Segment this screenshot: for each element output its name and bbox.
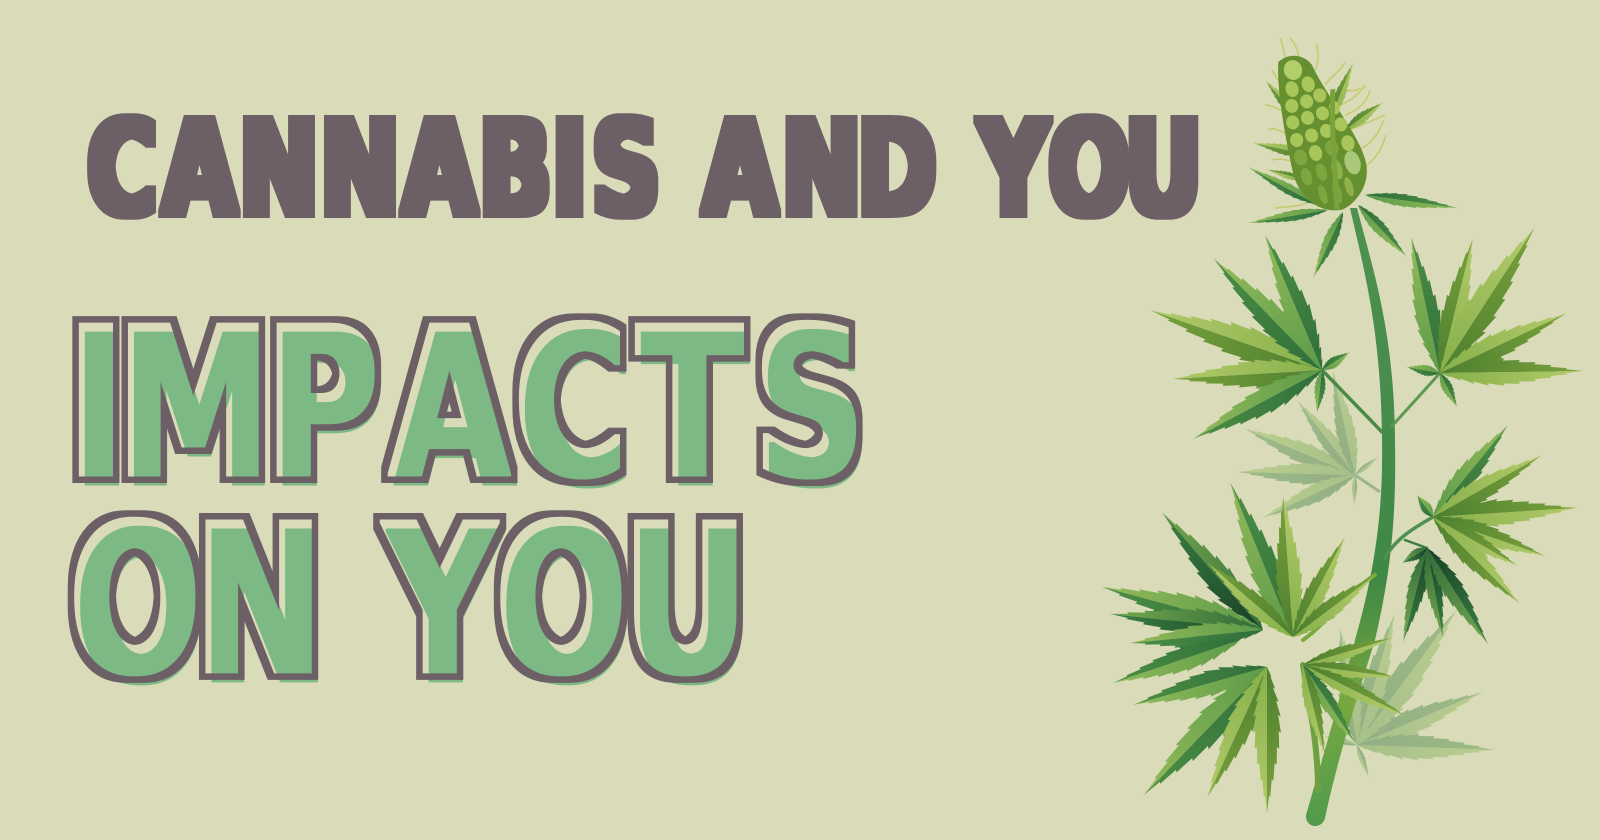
bud hairs [1265,38,1386,208]
branches [1303,370,1440,790]
bud body [1260,44,1377,220]
title: Cannabis and You: CANNABIS AND YOU [87,93,1202,245]
flower bud with bracts [1245,38,1459,280]
leaf: lower left dark fan [1098,503,1274,695]
leaf: small dark [1394,542,1497,650]
main stem [1306,208,1395,826]
faded background leaf, lower right [1322,600,1495,779]
leaf: lower centre left fan [1130,654,1281,813]
leaf: lower centre right fan [1295,631,1412,757]
leaf: lower centre upper fan [1201,476,1381,645]
heading: On You: ON YOU [69,481,748,722]
bud bracts [1245,162,1321,210]
leaf: right middle [1412,418,1579,612]
heading: Impacts: IMPACTS [67,284,865,525]
illustration: cannabis plant [1098,38,1583,826]
leaf: upper left [1144,229,1353,451]
leaf: upper right [1398,218,1583,410]
faded background leaf, middle [1237,368,1380,527]
